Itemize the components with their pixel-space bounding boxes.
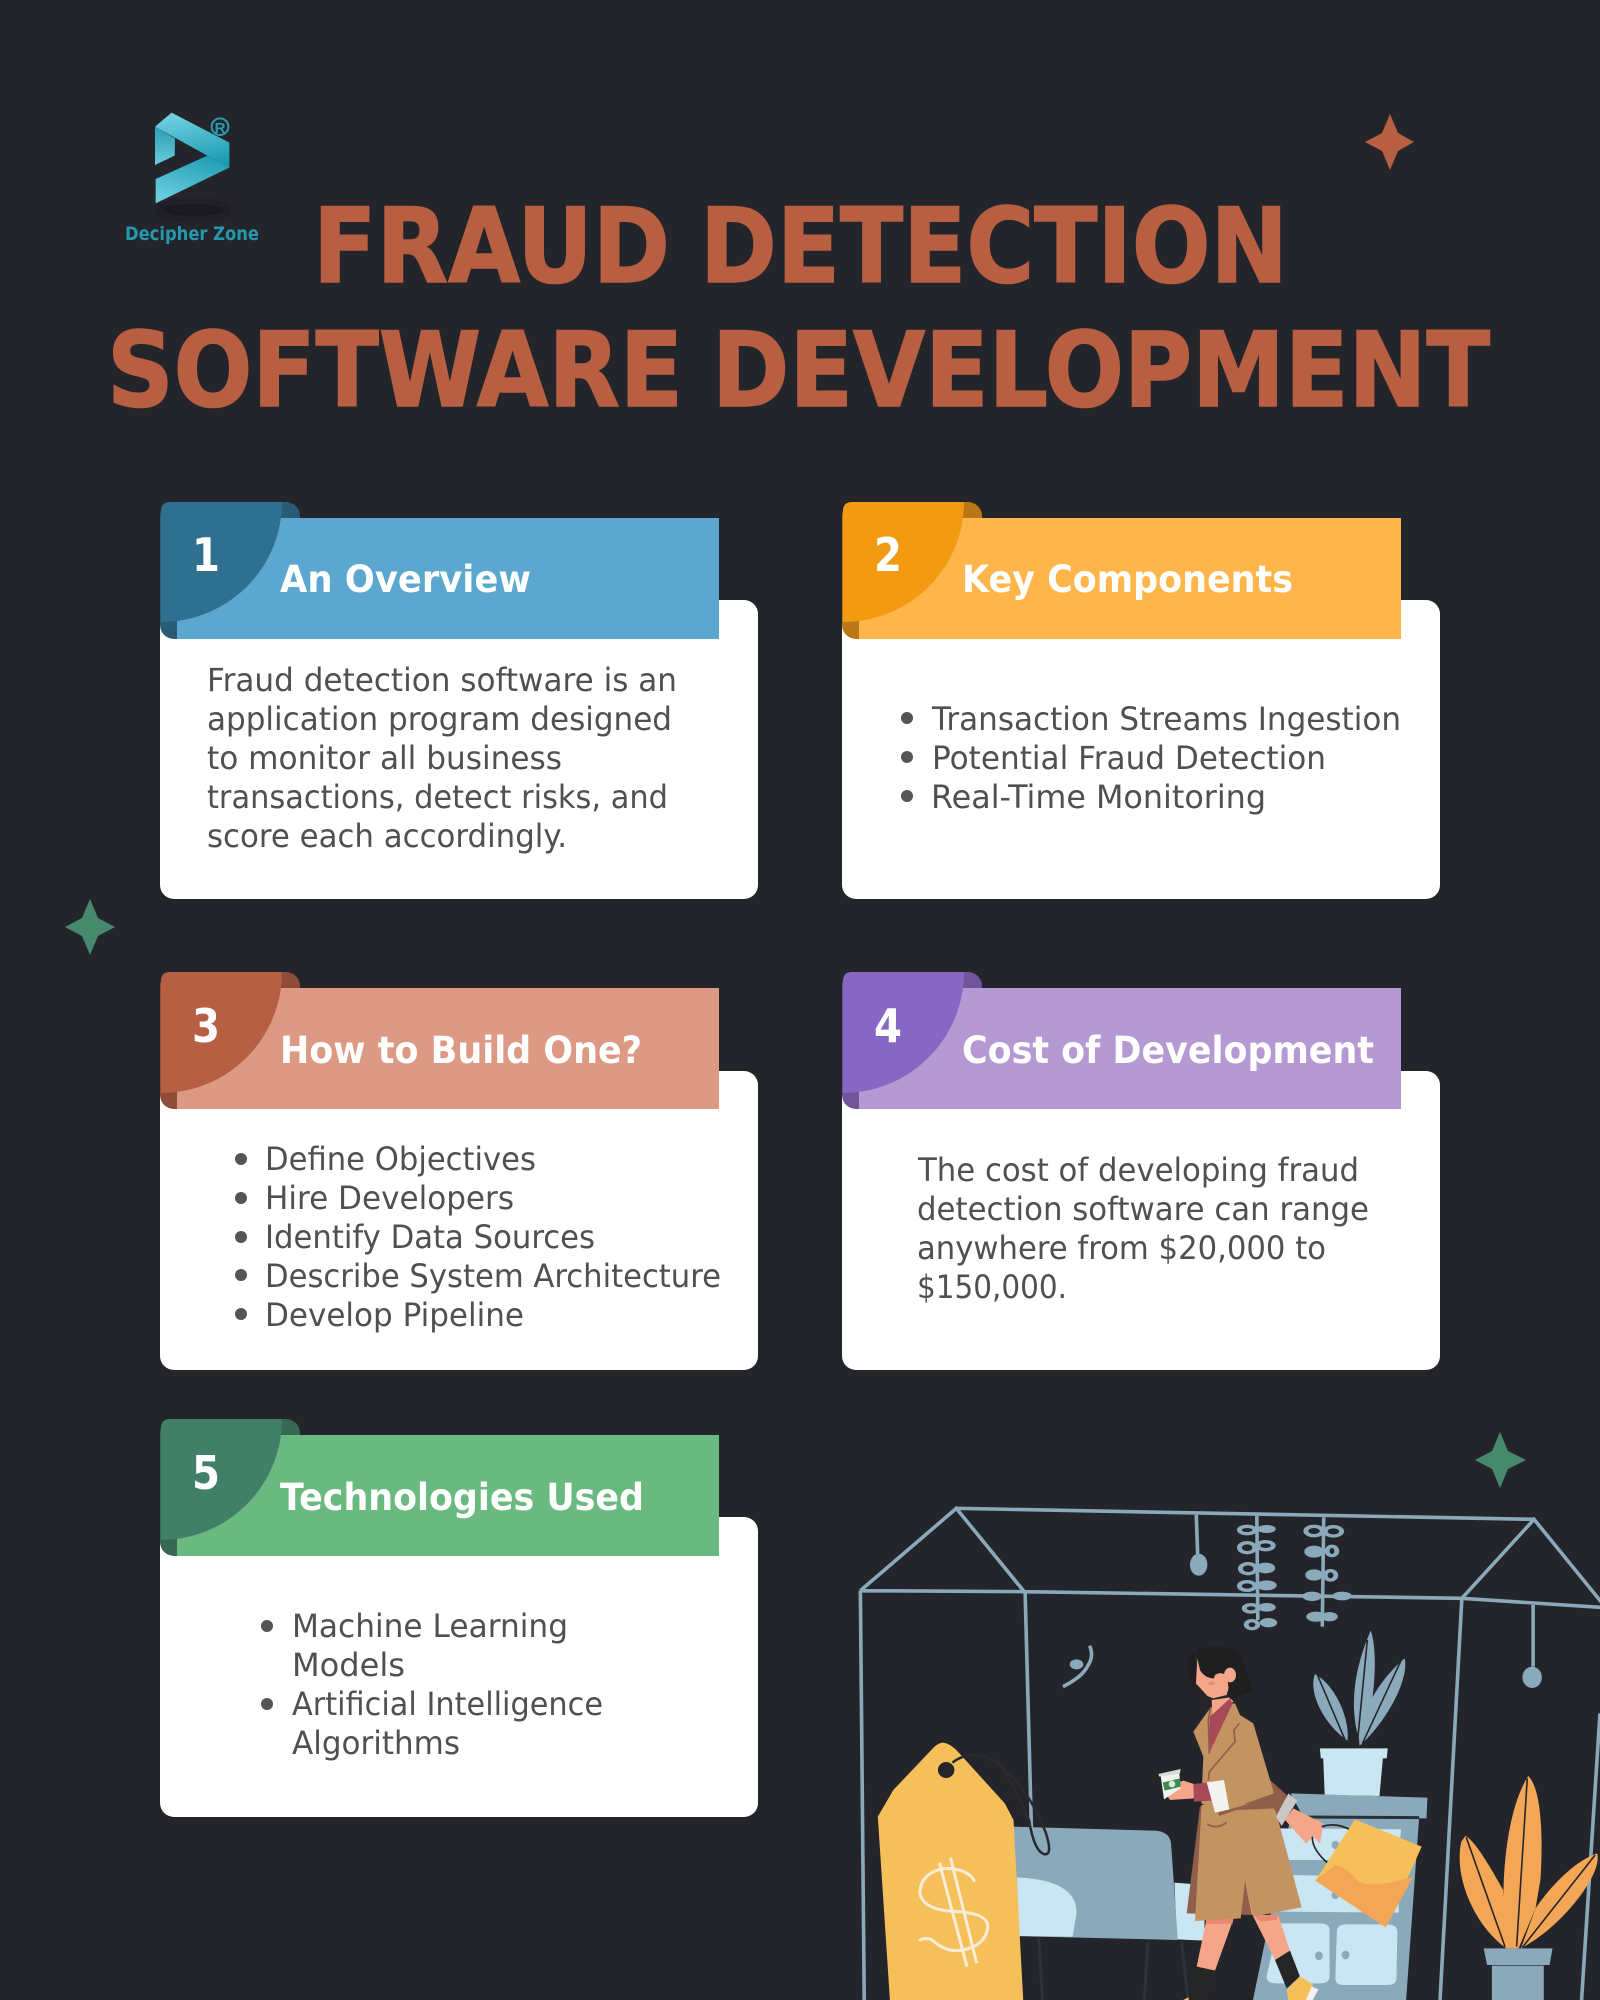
panel 3 bullet list [235, 1140, 721, 1334]
panel 2: Key Components: 2 [874, 528, 902, 582]
shopping bag [1312, 1825, 1352, 1865]
price tag with dollar sign [878, 1743, 1049, 2000]
panel 2 bullet list: Potential Fraud Detection [932, 739, 1326, 777]
panel 5: Technologies Used: Technologies Used [280, 1476, 644, 1519]
hanging lamps [1190, 1515, 1542, 1688]
icon: green sparkle star right [1475, 1432, 1526, 1488]
panel 4 body text: The cost of developing fraud [917, 1151, 1359, 1189]
orange potted plant [1460, 1776, 1598, 2000]
blue potted plant [1313, 1631, 1405, 1796]
panel 1 body text: score each accordingly. [207, 817, 567, 855]
panel 4 body text: $150,000. [917, 1268, 1067, 1306]
logo: Decipher Zone [125, 113, 259, 245]
legs [1197, 1919, 1233, 1971]
title: SOFTWARE [107, 311, 683, 431]
panel 1 body text: transactions, detect risks, and [207, 778, 668, 816]
panel 1: An Overview: An Overview [280, 558, 531, 601]
panel 3: How to Build One?: 3 [192, 999, 220, 1053]
panel 2 bullet list: Transaction Streams Ingestion [931, 700, 1401, 738]
icon: orange sparkle star [1365, 114, 1414, 170]
head and hair [1188, 1652, 1196, 1688]
logo: Decipher Zone: R [215, 120, 226, 137]
panel 2 bullet list: Real-Time Monitoring [931, 778, 1266, 816]
panel 5 bullet list: Machine Learning [292, 1607, 568, 1645]
panel 1 body text [207, 661, 677, 855]
title: FRAUD [313, 187, 670, 307]
woman with coffee and shopping bag [1158, 1646, 1422, 2000]
panel 3 bullet list: Develop Pipeline [265, 1296, 524, 1334]
panel 4: Cost of Development [842, 972, 1440, 1370]
panel 3 bullet list: Identify Data Sources [265, 1218, 595, 1256]
panel 1 body text: Fraud detection software is an [207, 661, 677, 699]
panel 1: An Overview [160, 502, 758, 899]
panel 3 bullet list: Define Objectives [265, 1140, 536, 1178]
hanging vines [1239, 1516, 1352, 1629]
panel 3: How to Build One? [160, 972, 758, 1370]
panel 5 bullet list [261, 1607, 603, 1762]
panel 4 body text: anywhere from $20,000 to [917, 1229, 1326, 1267]
title [107, 187, 1490, 431]
chair [1012, 1827, 1204, 2000]
panel 4 body text [917, 1151, 1369, 1306]
panel 5 bullet list: Artificial Intelligence [292, 1685, 603, 1723]
panel 2: Key Components: Key Components [962, 558, 1293, 601]
illustration: shop window with woman shopping [860, 1508, 1600, 2000]
title: DEVELOPMENT [712, 311, 1490, 431]
logo: Decipher Zone: Decipher Zone [125, 223, 259, 245]
arm and cuff holding cup [1162, 1781, 1194, 1800]
panel 1 body text: to monitor all business [207, 739, 562, 777]
panel 5 bullet list: Models [292, 1646, 405, 1684]
back arm [1276, 1793, 1297, 1826]
coat [1195, 1803, 1302, 1921]
small sprout [1063, 1646, 1092, 1687]
panel 4 body text: detection software can range [917, 1190, 1369, 1228]
title: DETECTION [700, 187, 1288, 307]
panel 2 bullet list [901, 700, 1401, 816]
panel 4: Cost of Development: 4 [874, 999, 902, 1053]
panel 5 bullet list: Algorithms [292, 1724, 460, 1762]
panel 3 bullet list: Hire Developers [265, 1179, 514, 1217]
panel 4: Cost of Development: Cost of Development [962, 1029, 1374, 1072]
icon: green sparkle star left [65, 899, 115, 955]
house outline [860, 1508, 1600, 2000]
panel 1: An Overview: 1 [192, 528, 220, 582]
socks and shoes [1188, 1967, 1215, 2000]
panel 3: How to Build One?: How to Build One? [280, 1029, 642, 1072]
panel 2: Key Components [842, 502, 1440, 899]
back coat [1187, 1780, 1287, 1915]
panel 1 body text: application program designed [207, 700, 672, 738]
panel 5: Technologies Used: 5 [192, 1446, 220, 1500]
panel 3 bullet list: Describe System Architecture [265, 1257, 721, 1295]
cabinet [1253, 1793, 1427, 2000]
panel 5: Technologies Used [160, 1419, 758, 1817]
